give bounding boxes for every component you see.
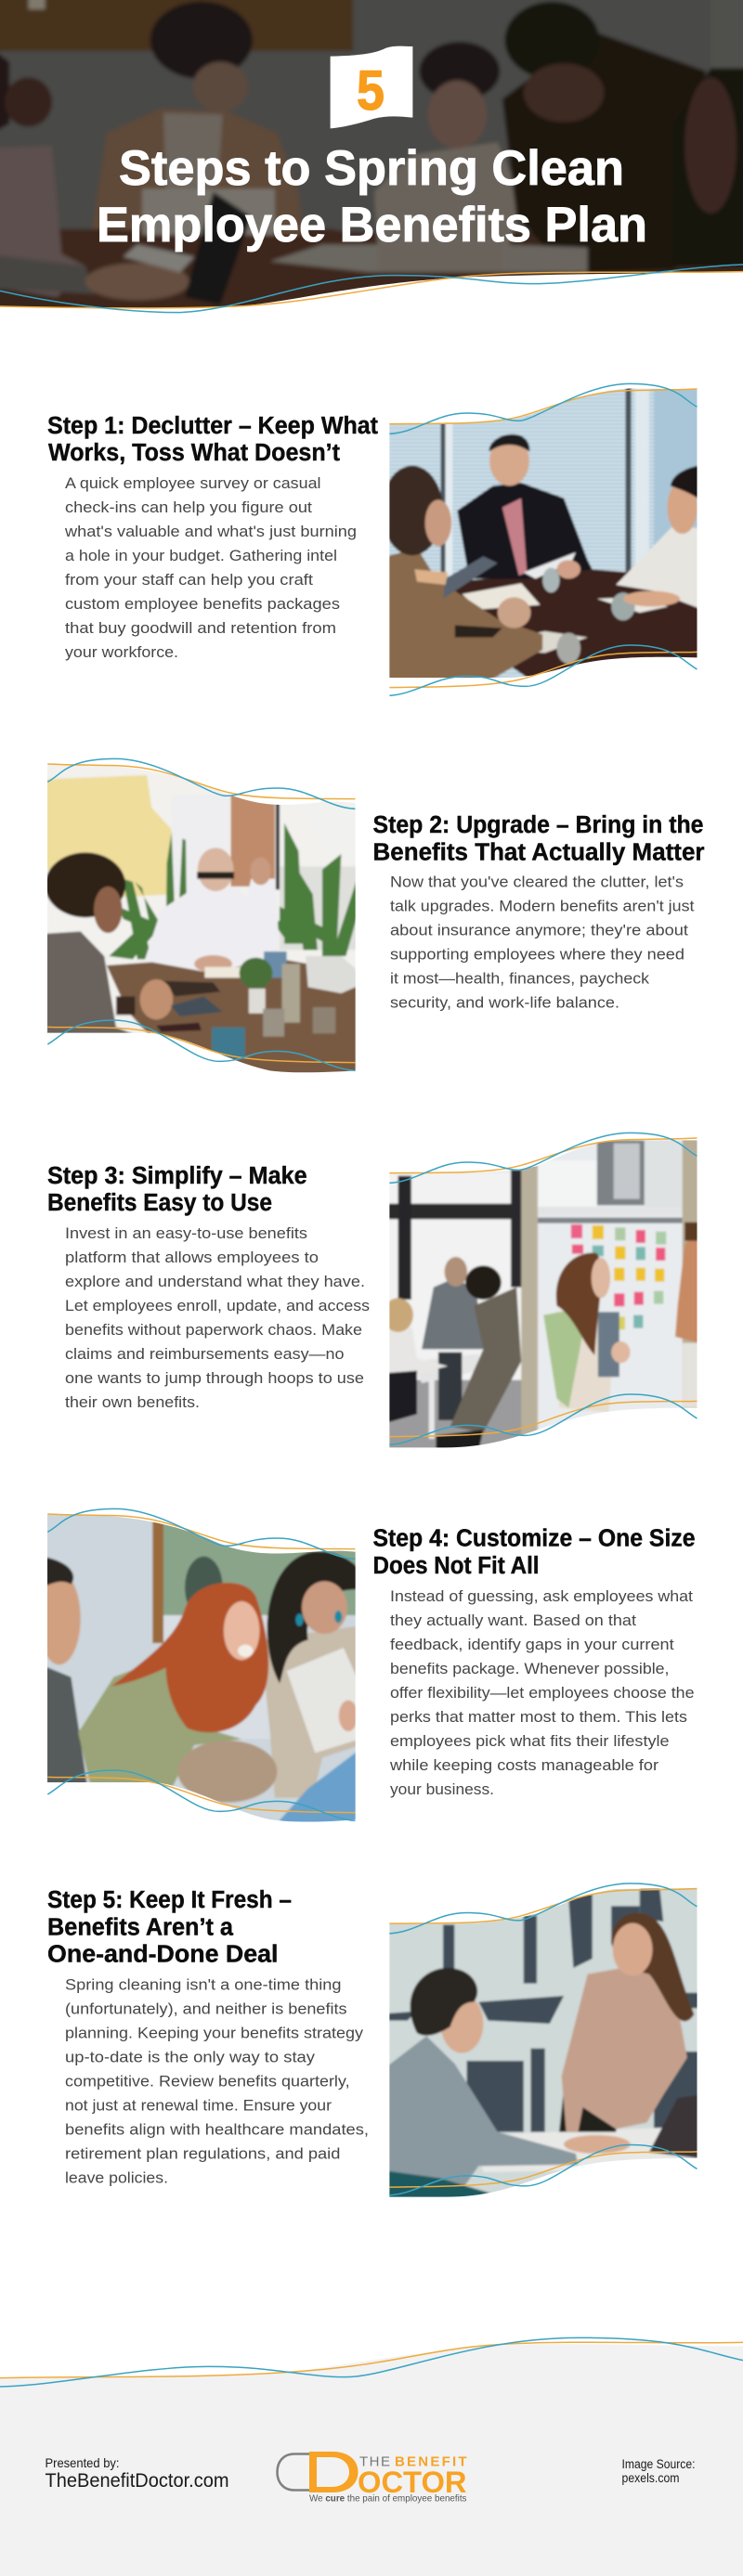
step 1 body text: what's valuable and what's just burning (64, 523, 357, 540)
step 3 body text: Invest in an easy-to-use benefits (65, 1224, 307, 1242)
woman left (389, 550, 544, 678)
bald head (177, 1741, 277, 1803)
step 3 body text: their own benefits. (65, 1393, 200, 1411)
step 3 body text (65, 1224, 370, 1411)
presented by (45, 2455, 228, 2492)
step 1 body text: from your staff can help you craft (65, 571, 313, 589)
step 3 wave lines (389, 1133, 697, 1444)
step 1 photo (389, 388, 697, 678)
image source: pexels.com (622, 2471, 680, 2485)
step 3 body text: platform that allows employees to (65, 1249, 319, 1266)
step 5 heading: Step 5: Keep It Fresh – (47, 1887, 292, 1913)
step 5 body text (65, 1975, 369, 2187)
step 4 photo (47, 1515, 356, 1821)
step 1 body text: that buy goodwill and retention from (65, 619, 336, 637)
step 2 photo (47, 765, 356, 1073)
man right (615, 526, 697, 610)
man in suit (457, 483, 593, 578)
step 2 heading (373, 812, 705, 865)
papers (462, 583, 541, 610)
number badge: 5 (357, 59, 385, 122)
title (97, 141, 647, 252)
woman (559, 2089, 620, 2132)
step 4 body text: Instead of guessing, ask employees what (390, 1587, 693, 1605)
image source (622, 2457, 695, 2485)
step 4 heading (373, 1526, 695, 1579)
objects (171, 996, 223, 1016)
table (412, 1353, 478, 1383)
step 5 heading (47, 1887, 292, 1968)
step 4 body text: perks that matter most to them. This lets (390, 1708, 687, 1726)
step 1 heading (47, 413, 378, 466)
desk (474, 2126, 710, 2172)
woman with curly hair (92, 109, 304, 235)
step 4 body text: benefits package. Whenever possible, (390, 1660, 669, 1677)
step 4 body text: feedback, identify gaps in your current (390, 1636, 674, 1653)
step 2 heading: Benefits That Actually Matter (373, 839, 705, 865)
step 3 body text: benefits without paperwork chaos. Make (65, 1321, 362, 1339)
plants (109, 823, 370, 959)
panel: step 5 (47, 1878, 710, 2207)
step 1 body text: custom employee benefits packages (65, 595, 340, 613)
blue shirt (279, 1752, 356, 1821)
step 3 heading: Benefits Easy to Use (47, 1190, 272, 1216)
step 5 body text: up-to-date is the only way to stay (65, 2048, 316, 2066)
title: Employee Benefits Plan (97, 198, 647, 252)
step 1 body text (64, 474, 357, 661)
header photo (0, 0, 743, 322)
title: Steps to Spring Clean (119, 141, 624, 196)
step 2 body text: supporting employees where they need (390, 945, 684, 964)
step 4 body text: offer flexibility—let employees choose the (390, 1684, 695, 1702)
step 3 heading: Step 3: Simplify – Make (47, 1163, 307, 1189)
step 4 body text (389, 1587, 695, 1798)
panel: step 4 (33, 1504, 696, 1829)
chair (374, 2169, 493, 2203)
step 4 body text: while keeping costs manageable for (389, 1756, 658, 1774)
step 4 body text: they actually want. Based on that (390, 1612, 636, 1629)
logo: The Benefit Doctor (277, 2452, 466, 2505)
step 3 body text: explore and understand what they have. (65, 1273, 365, 1290)
logo: The Benefit Doctor: BENEFIT (395, 2454, 466, 2469)
woman right (264, 1625, 356, 1799)
step 2 body text: Now that you've cleared the clutter, let's (390, 873, 684, 891)
man right (674, 1239, 697, 1342)
table (0, 227, 743, 306)
step 2 heading: Step 2: Upgrade – Bring in the (373, 812, 704, 838)
image source: Image Source: (622, 2457, 695, 2471)
panel: step 1 (47, 378, 710, 695)
step 5 body text: retirement plan regulations, and paid (65, 2144, 340, 2163)
table (106, 959, 356, 1073)
step 2 body text: talk upgrades. Modern benefits aren't just (390, 897, 695, 915)
footer (0, 2337, 743, 2576)
seated woman (390, 1327, 449, 1373)
step 2 body text (390, 873, 695, 1012)
step 1 heading: Works, Toss What Doesn’t (48, 440, 340, 466)
woman center (374, 142, 521, 272)
step 5 body text: leave policies. (65, 2168, 168, 2187)
laptop (649, 2093, 710, 2160)
logo: The Benefit Doctor: We cure the pain of employee benefits (309, 2493, 466, 2505)
step 5 photo (374, 1878, 710, 2207)
step 3 body text: claims and reimbursements easy—no (65, 1345, 344, 1363)
step 1 body text: your workforce. (65, 643, 178, 661)
step 1 body text: A quick employee survey or casual (65, 474, 321, 492)
step 2 body text: security, and work-life balance. (390, 993, 619, 1012)
panel: step 2 (33, 755, 705, 1080)
man (143, 892, 266, 973)
step 4 heading: Step 4: Customize – One Size (373, 1526, 695, 1552)
step 3 photo (389, 1140, 697, 1448)
step 5 heading: Benefits Aren’t a (47, 1914, 234, 1940)
step 4 body text: your business. (390, 1780, 494, 1798)
step 3 body text: Let employees enroll, update, and access (65, 1297, 370, 1314)
step 1 body text: check-ins can help you figure out (65, 498, 312, 516)
sticky notes (571, 1224, 666, 1329)
logo: The Benefit Doctor: THE (359, 2454, 390, 2469)
step 5 body text: competitive. Review benefits quarterly, (65, 2072, 350, 2091)
header wave lines (0, 265, 743, 313)
step 1 body text: a hole in your budget. Gathering intel (65, 547, 337, 564)
step 4 heading: Does Not Fit All (373, 1553, 539, 1579)
step 5 body text: (unfortunately), and neither is benefits (65, 2000, 347, 2018)
man bending (502, 31, 706, 272)
presented by: TheBenefitDoctor.com (45, 2470, 228, 2492)
step 1 wave lines (389, 383, 697, 695)
table (453, 568, 697, 677)
step 2 wave lines (47, 758, 355, 1070)
step 4 body text: employees pick what fits their lifestyle (390, 1732, 669, 1750)
step 5 heading: One-and-Done Deal (47, 1942, 279, 1968)
left person (0, 146, 85, 297)
header white wave (0, 272, 743, 356)
bottom right (502, 244, 588, 272)
footer background (0, 2344, 743, 2576)
step 5 body text: not just at renewal time. Ensure your (65, 2096, 332, 2115)
man (374, 2036, 578, 2200)
woman standing (555, 1311, 611, 1413)
step 5 body text: Spring cleaning isn't a one-time thing (65, 1975, 342, 1994)
man in brown (450, 1288, 521, 1432)
step 5 wave lines (389, 1883, 697, 2195)
man in grey (422, 1278, 483, 1349)
woman (47, 930, 134, 1033)
step 1 heading: Step 1: Declutter – Keep What (47, 413, 378, 439)
step 2 body text: about insurance anymore; they're about (390, 921, 688, 939)
right person (672, 68, 743, 266)
footer wave lines (0, 2337, 743, 2387)
step 5 body text: planning. Keeping your benefits strategy (65, 2024, 364, 2042)
presented by: Presented by: (45, 2455, 119, 2470)
logo: The Benefit Doctor: OCTOR (358, 2466, 466, 2499)
header banner (0, 0, 743, 314)
man left (47, 1666, 88, 1782)
step 3 heading (47, 1163, 307, 1216)
panel: step 3 (47, 1133, 710, 1457)
step 2 body text: it most—health, finances, paycheck (390, 969, 650, 988)
step 4 wave lines (47, 1508, 355, 1820)
redhead (77, 1666, 241, 1786)
number badge (331, 46, 412, 128)
step 3 body text: one wants to jump through hoops to use (65, 1369, 364, 1387)
step 5 body text: benefits align with healthcare mandates, (65, 2120, 369, 2139)
